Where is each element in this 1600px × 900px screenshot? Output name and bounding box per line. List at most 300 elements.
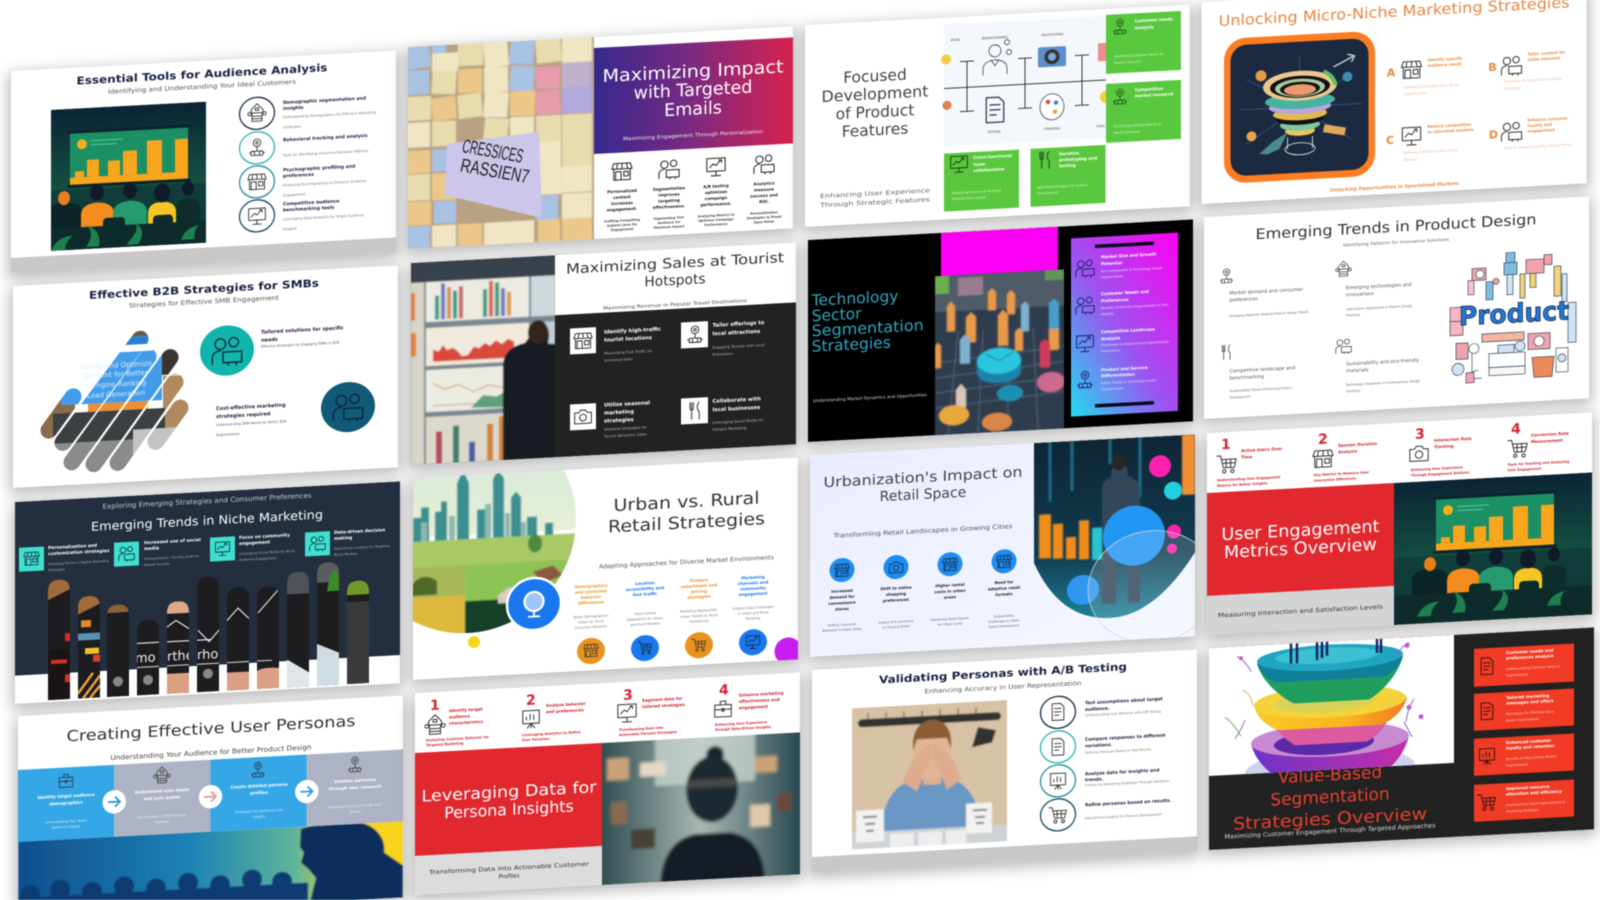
- trend items with teal icons: Leveraging Social Media for Niche: [239, 549, 295, 556]
- four strategy columns: channels and: [738, 579, 768, 586]
- trend items with teal icons: Personalization and: [48, 543, 97, 551]
- four strategy columns: assortment and: [681, 582, 717, 589]
- four tactics A to D: D: [1489, 128, 1498, 142]
- dark panel with four tactics: Engaging Tourists with Local: [712, 343, 765, 350]
- four tactics A to D: Identifying Profitable Micro-Niche: [1404, 83, 1459, 90]
- four strategy columns: Urban vs. Rural: [578, 619, 604, 624]
- list: four tools with circled icons: Competitive audience: [283, 198, 339, 207]
- list: four tools with circled icons: Strategies: [283, 124, 301, 129]
- four tactics A to D: C: [1386, 134, 1394, 147]
- four icon columns: A/B testing: [703, 183, 729, 189]
- four impact columns: Need for: [995, 579, 1014, 585]
- four strategy columns: and consumer: [575, 588, 607, 595]
- heading: Focused: [843, 66, 907, 87]
- four tactics A to D: Markets: [1404, 157, 1417, 162]
- top row: four numbered metrics: 2: [1318, 432, 1328, 448]
- heading: Strategies: [812, 334, 891, 356]
- four icon columns: [604, 154, 782, 233]
- green feature cards: Market Demand: [1114, 130, 1139, 135]
- four tactics A to D: [1386, 49, 1571, 163]
- text: cost-effective marketing: Segmentation: [216, 432, 240, 437]
- four strategy columns: behavior: [581, 594, 601, 600]
- process: four step blocks: Testing: [348, 809, 361, 814]
- timeline illustration: BRAINSTORMING: [982, 35, 1009, 41]
- four tactics A to D: Tailor content for: [1528, 50, 1565, 57]
- trend items with teal icons: Data-driven decision: [334, 527, 385, 536]
- arrows between steps: [103, 779, 318, 814]
- four impact columns: convenience: [828, 600, 856, 606]
- panel: Urbanization's Impact on Retail Space slide: [807, 433, 1216, 663]
- process: four step blocks: through user research: [329, 784, 381, 791]
- four strategy columns: Consumer Behavior: [575, 624, 608, 630]
- dark panel with four tactics: marketing: [604, 409, 634, 417]
- title band with gradient: with Targeted: [634, 78, 752, 104]
- timeline illustration: FINAL: [1097, 124, 1106, 128]
- four trend items: innovations: [1346, 291, 1374, 298]
- red benefit cards: messages and offers: [1506, 698, 1554, 706]
- trend items with teal icons: Data-Driven Insights for Targeting: [334, 544, 390, 551]
- dark panel with four tactics: Identify high-traffic: [604, 327, 661, 336]
- dark panel with four tactics: Maximizing Foot Traffic for: [604, 349, 653, 356]
- dark panel with four tactics: [555, 302, 796, 457]
- four icon columns: Crafting Compelling: [604, 218, 641, 224]
- top row: four numbered metrics: Interaction Rate: [1434, 436, 1472, 443]
- heading: Urban vs. Rural: [614, 487, 760, 515]
- four strategy columns: community: [740, 585, 766, 591]
- four icon columns: measure: [754, 186, 774, 192]
- gradient list panel: Potential: [1101, 260, 1123, 266]
- dark panel with four tactics: Leveraging Social Media for: [712, 418, 764, 425]
- panel: Essential Tools for Audience Analysis slide: [8, 50, 399, 279]
- illustration: layered funnel with people: [1225, 632, 1424, 797]
- four tactics A to D: Tools for Researching Micro-Niche Trends: [1503, 143, 1571, 150]
- grey subtitle: Transforming Data into Actionable Customer: [428, 862, 590, 876]
- list: four tools with circled icons: Demographic segmentation and: [283, 96, 366, 106]
- top row: four numbered metrics: User Engagement: [1508, 467, 1542, 472]
- four icon columns: Personalization: [750, 210, 779, 216]
- heading: [566, 252, 784, 288]
- illustration: colourful funnel in orange frame: [1224, 31, 1375, 184]
- heading: Development: [822, 82, 929, 106]
- process: four step blocks: [18, 749, 403, 842]
- four trend items: [1220, 257, 1420, 400]
- list: four tools with circled icons: Insights: [283, 227, 297, 231]
- trend items with teal icons: Emerging Niches in Digital Marketing: [48, 559, 109, 566]
- top row: four numbered steps: effectiveness and: [739, 697, 780, 704]
- top row: four numbered steps: Identify target: [449, 706, 483, 713]
- gradient list panel: Differentiation: [1101, 372, 1135, 378]
- top row: four numbered metrics: Conversion Rate: [1531, 431, 1569, 438]
- text: tailored solutions: Tailored solutions for specific: [261, 325, 344, 336]
- subheading: [819, 187, 930, 209]
- panel: Creating Effective User Personas slide: [15, 695, 406, 900]
- four trend items: Technology Integration in Contemporary Design: [1345, 379, 1420, 387]
- process: four step blocks: Create detailed persona: [231, 782, 288, 790]
- dark panel with four tactics: Hotspot Marketing: [712, 426, 746, 432]
- process: four step blocks: profiles: [250, 790, 268, 796]
- top row: four numbered metrics: Understanding User Engagement: [1217, 475, 1281, 482]
- heading: Retail Strategies: [608, 508, 765, 537]
- list: four test steps with circled icons: Understanding User Behavior with A/B Testing: [1085, 709, 1161, 717]
- four tactics A to D: audience needs: [1428, 61, 1463, 68]
- trend items with teal icons: Market Success: [144, 562, 170, 567]
- four strategy columns: Urban Trends vs. Rural: [680, 613, 718, 619]
- process: four step blocks: Insights: [253, 814, 266, 819]
- top row: four numbered steps: 4: [719, 682, 729, 699]
- list: four test steps with circled icons: Refining Personas Based on Test Results: [1085, 747, 1151, 755]
- process: four step blocks: Audience's Needs: [52, 824, 80, 830]
- timeline illustration: ATION: [950, 38, 960, 42]
- trend items with teal icons: Audience Engagement: [239, 556, 277, 562]
- list: four test steps with circled icons: Analyze data for insights and: [1085, 767, 1159, 777]
- heading: Segmentation: [812, 316, 924, 340]
- four trend items: Emerging technologies and: [1346, 282, 1412, 291]
- four trend items: Practices: [1346, 313, 1360, 317]
- subheading: Exploring Emerging Strategies and Consumer Preferences: [103, 492, 312, 511]
- green feature cards: Prioritizing Features Based on: [1114, 122, 1161, 128]
- list: four test steps with circled icons: audience.: [1085, 706, 1110, 713]
- top row: four numbered steps: 2: [526, 693, 536, 709]
- subheading: Identifying Patterns for Innovative Solutions: [1343, 237, 1450, 249]
- dark panel with four tactics: local attractions: [712, 329, 760, 337]
- top row: four numbered metrics: Time: [1241, 454, 1252, 460]
- photo: wall of sticky notes: [404, 33, 598, 253]
- laptop screen text: Revise and Optimize: [80, 360, 152, 371]
- green feature cards: Customer needs: [1135, 16, 1173, 23]
- four icon columns: Optimize Campaign: [698, 217, 734, 223]
- illustration: product doodles: [1450, 249, 1576, 384]
- heading: Segmentation: [1270, 784, 1390, 811]
- four impact columns: demand for: [829, 594, 855, 600]
- subheading: Maximizing Customer Engagement Through Targeted Approaches: [1224, 822, 1436, 841]
- four trend items: Market demand and consumer: [1230, 287, 1303, 297]
- four trend items: preferences: [1230, 296, 1258, 304]
- text: tailored solutions: [261, 325, 344, 349]
- green feature cards: Agile Methodologies for Feature: [1037, 183, 1088, 190]
- red benefit cards: Enhanced customer: [1506, 738, 1551, 745]
- photo: man covering eyes with eye charts: [848, 695, 1011, 854]
- top row: four numbered metrics: [1217, 419, 1570, 488]
- red benefit cards: preferences analysis: [1506, 653, 1554, 661]
- green feature cards: Iterative: [1059, 150, 1079, 156]
- process: four step blocks: Key Elements of Effective User: [138, 813, 187, 820]
- list: four tools with circled icons: Tools for Identifying Consumer Behavior Patterns: [282, 149, 369, 158]
- four icon columns: Personalized: [607, 188, 637, 194]
- panel: Maximizing Impact with Targeted Emails slide: [404, 22, 796, 255]
- list: four test steps with circled icons: variations.: [1085, 742, 1112, 749]
- four strategy columns: strategies: [687, 594, 711, 600]
- top row: four numbered steps: tailored strategies: [642, 702, 685, 709]
- top row: four numbered metrics: Measurement: [1531, 437, 1563, 444]
- laptop screen text: [80, 360, 152, 400]
- four icon columns: Subject Lines for: [607, 222, 638, 228]
- panel: Maximizing Sales at Tourist Hotspots slide: [407, 238, 799, 471]
- four icon columns: performance.: [700, 201, 732, 207]
- green feature cards: Development: [1037, 190, 1059, 196]
- photo: 3D market pins and pie: [931, 265, 1068, 439]
- four icon columns: ROI.: [759, 199, 769, 204]
- top row: four numbered metrics: 1: [1221, 437, 1231, 453]
- trend items with teal icons: Increased use of social: [144, 537, 201, 546]
- subheading: Enhancing User Experience: [820, 187, 930, 200]
- list: four tools with circled icons: Behavioral tracking and analysis: [283, 133, 368, 143]
- heading: Effective B2B Strategies for SMBs: [89, 278, 319, 302]
- red benefit cards: loyalty and retention: [1506, 743, 1555, 751]
- green feature cards: market research: [1135, 91, 1173, 98]
- gradient list panel: Preferences: [1101, 297, 1129, 303]
- icon: teal circle with team: [200, 324, 254, 377]
- text: cost-effective marketing: Cost-effective marketing: [216, 402, 286, 412]
- top row: four numbered steps: 1: [430, 698, 440, 714]
- heading: [824, 465, 1022, 508]
- four icon columns: increases: [611, 200, 634, 206]
- grey subtitle: [415, 846, 602, 895]
- four impact columns: Increased: [831, 588, 853, 594]
- four strategy columns: Target Demographics:: [572, 614, 609, 619]
- list: four test steps with circled icons: Test assumptions about target: [1085, 696, 1164, 706]
- four tactics A to D: Opportunities: [1404, 91, 1427, 96]
- green feature cards: Measuring Success of Targeted: [952, 188, 1001, 195]
- gradient list panel: Markets: [1101, 312, 1114, 316]
- heading: Strategies Overview: [1233, 804, 1427, 835]
- gradient list panel: Customer Needs and: [1101, 289, 1149, 296]
- gradient list panel: Market Size and Growth: [1101, 251, 1156, 259]
- green feature cards: Features Post-Launch: [952, 195, 986, 201]
- top row: four numbered steps: Analyze behavior: [546, 701, 586, 708]
- subheading: Strategies for Effective SMB Engagement: [129, 295, 280, 310]
- timeline illustration: PROTOTYPING: [1041, 32, 1064, 37]
- top row: four numbered steps: [425, 679, 784, 747]
- four icon columns: Audience for: [658, 220, 681, 225]
- process: four step blocks: Techniques for Gathering User: [234, 808, 284, 814]
- list: four tools with circled icons: Engagement: [283, 192, 306, 197]
- four trend items: Development: [1230, 394, 1251, 400]
- four impact columns: areas: [944, 594, 957, 600]
- gradient list panel: Benefits of Effective Segmentation in Tech: [1101, 303, 1168, 310]
- four impact columns: Higher rental: [935, 582, 965, 588]
- dark panel with four tactics: Utilize seasonal: [604, 400, 650, 409]
- four impact columns: Sustainability: [994, 614, 1015, 619]
- illustration: audience watching bar chart: [1392, 472, 1592, 626]
- red benefit cards: Techniques for Effective Value-: [1505, 709, 1555, 716]
- four icon columns: engagement.: [607, 206, 638, 212]
- four tactics A to D: A: [1387, 66, 1396, 80]
- subheading: Adapting Approaches for Diverse Market Environments: [599, 554, 774, 571]
- process: four step blocks: demographics: [49, 800, 83, 806]
- four trend items: materials: [1346, 367, 1369, 374]
- photo strips: marketing chalkboard: rthe: [167, 648, 194, 665]
- four strategy columns: Location: [635, 580, 655, 586]
- top row: four numbered steps: through Data-Driven Insights: [715, 725, 771, 732]
- list: four test steps with circled icons: Enhancing Marketing Strategies Through Validation: [1085, 779, 1170, 787]
- four tactics A to D: Marketing: [1504, 86, 1520, 91]
- text: tailored solutions: needs: [261, 337, 278, 344]
- four impact columns: Challenges in Urban: [988, 618, 1020, 624]
- top row: four numbered steps: Analyzing Customer Behavior for: [426, 735, 489, 742]
- red benefit cards: Implementing Value Segmentation in: [1506, 800, 1565, 807]
- four strategy columns: engagement: [739, 591, 768, 597]
- green feature cards: [944, 11, 1181, 212]
- panel: Urban vs. Rural Retail Strategies slide: [403, 452, 808, 692]
- red benefit cards: Marketing Strategies: [1506, 808, 1539, 814]
- top row: four numbered metrics: Analysis: [1338, 448, 1358, 454]
- red title panel: Persona Insights: [444, 797, 574, 822]
- four impact columns: Redefining Retail Spaces: [931, 616, 969, 622]
- top row: four numbered metrics: 4: [1511, 421, 1521, 438]
- gradient list panel: Analysis: [1101, 335, 1121, 341]
- four icon columns: optimizes: [705, 189, 728, 195]
- trend items with teal icons: making: [334, 535, 352, 542]
- four trend items: Competitive landscape and: [1230, 365, 1295, 375]
- dark panel with four tactics: Promotions: [712, 352, 733, 357]
- trend items with teal icons: Strategies: [48, 567, 65, 572]
- process: four step blocks: Understanding Your Target: [45, 818, 88, 825]
- top row: four numbered steps: characteristics: [449, 719, 484, 726]
- four impact columns: [822, 548, 1020, 638]
- dark panel with four tactics: Collaborate with: [712, 396, 761, 405]
- four impact columns: Behaviors in Urban Areas: [822, 627, 862, 633]
- heading: Validating Personas with A/B Testing: [879, 661, 1127, 686]
- top row: four numbered metrics: 3: [1415, 426, 1425, 443]
- top row: four numbered steps: audience: [449, 713, 470, 719]
- four trend items: Solutions: [1346, 389, 1361, 393]
- gradient list panel: Competitive Landscape: [1101, 326, 1155, 334]
- green feature cards: Competitive: [1135, 86, 1163, 92]
- top row: four numbered metrics: Key Metrics to Measure User: [1314, 470, 1369, 477]
- grey subtitle: Measuring Interaction and Satisfaction Levels: [1218, 604, 1383, 619]
- four strategy columns: Adaptations for Urban: [627, 616, 663, 622]
- four impact columns: on Physical Retail: [882, 624, 910, 630]
- timeline illustration: ITERATING: [1044, 126, 1061, 131]
- grey subtitle: Profiles: [498, 873, 520, 881]
- red benefit cards: Benefits of Value-Driven Market: [1506, 754, 1557, 761]
- note: large lavender paper with handwriting: [444, 132, 542, 223]
- text: tailored solutions: Effective Strategies for Engaging SMBs in B2B: [261, 341, 340, 349]
- four icon columns: Strategies to Boost: [747, 214, 782, 220]
- heading: Features: [842, 119, 908, 141]
- panel: Effective B2B Strategies for SMBs slide: [10, 265, 401, 494]
- four impact columns: Impact of E-commerce: [878, 619, 914, 625]
- four strategy columns: Product: [690, 577, 708, 583]
- four impact columns: preferences: [883, 597, 910, 603]
- top row: four numbered metrics: Tracking: [1434, 443, 1454, 449]
- four tactics A to D: Building Authority in Micro-Niche: [1404, 148, 1458, 155]
- top row: four numbered steps: 3: [623, 687, 633, 704]
- four tactics A to D: Identify specific: [1428, 56, 1463, 62]
- subheading: Understanding Market Dynamics and Opportunities: [813, 392, 927, 403]
- illustration: audience watching bar chart: [50, 101, 207, 252]
- heading: [811, 286, 924, 356]
- top row: four numbered steps: Enhancing User Experience: [715, 720, 768, 727]
- top row: four numbered metrics: Active Users Over: [1241, 446, 1282, 453]
- four trend items: Sustainability and eco-friendly: [1346, 357, 1419, 367]
- green feature cards: testing: [1059, 163, 1076, 168]
- four tactics A to D: loyalty and: [1528, 122, 1552, 128]
- four icon columns: Open Rates: [754, 219, 774, 225]
- dark panel with four tactics: Increased Sales: [604, 357, 633, 363]
- heading: Creating Effective User Personas: [67, 712, 356, 745]
- four impact columns: Shifting Consumer: [828, 622, 857, 628]
- green feature cards: team: [973, 161, 986, 167]
- four strategy columns: Retailing: [746, 616, 760, 621]
- red benefit cards: Segmentation: [1506, 672, 1528, 678]
- footer tagline: Unlocking Opportunities in Specialized Markets: [1330, 181, 1459, 194]
- image: city and countryside circle: [412, 470, 576, 634]
- laptop screen text: Content for Better: [84, 369, 148, 380]
- heading: of Product: [836, 101, 914, 123]
- four icon columns: Analytics: [753, 180, 775, 187]
- photo strips: marketing chalkboard: mo: [135, 650, 156, 667]
- dark panel with four tactics: local businesses: [712, 405, 760, 413]
- heading: Value-Based: [1278, 763, 1382, 788]
- timeline illustration: [941, 16, 1112, 147]
- four tactics A to D: Reduce competition: [1428, 122, 1471, 129]
- list: four test steps with circled icons: Data-Driven Insights for Persona Development: [1085, 812, 1162, 820]
- icon: navy circle with team: [321, 381, 375, 434]
- heading: Retail Space: [880, 485, 966, 505]
- list: four test steps with circled icons: trends.: [1085, 776, 1104, 783]
- process: four step blocks: Validate personas: [334, 777, 377, 784]
- illustration: sliced laptop: [40, 330, 190, 473]
- four impact columns: Retail Development: [989, 623, 1020, 629]
- red benefit cards: Tailored marketing: [1506, 693, 1549, 700]
- note: large lavender paper with handwriting: RASSIEN7: [458, 155, 531, 188]
- panel: Technology Sector Segmentation Strategies slide: [805, 219, 1196, 448]
- four strategy columns: differences: [578, 599, 604, 606]
- four strategy columns: foot traffic: [633, 591, 658, 597]
- list: four tools with circled icons: Leveraging Data Analytics for Target Audience: [283, 213, 364, 221]
- four trend items: benchmarking: [1230, 374, 1264, 382]
- four strategy columns: pricing: [691, 588, 707, 594]
- photo: man with floating orbs and bar chart: [1034, 434, 1195, 633]
- trend items with teal icons: Niche Markets: [334, 552, 358, 557]
- title band with gradient: [594, 37, 793, 154]
- four trend items: Sustainability Trends Influencing Product: [1230, 386, 1293, 393]
- four icon columns: Segmenting Your: [654, 215, 685, 221]
- top row: four numbered steps: and preferences: [546, 707, 584, 714]
- four icon columns: Engagement: [611, 227, 634, 232]
- top row: four numbered steps: engagement: [739, 704, 768, 710]
- four icon columns: improves: [658, 191, 680, 198]
- process: four step blocks: Personas: [155, 819, 169, 824]
- four impact columns: adaptive retail: [988, 585, 1020, 591]
- gradient list panel: Future Trends in Technology Sector: [1101, 378, 1157, 385]
- green feature cards: Product Features: [1114, 60, 1141, 65]
- four strategy columns: Marketing Approaches:: [680, 608, 718, 614]
- trend items with teal icons: [19, 527, 390, 574]
- four strategy columns: [572, 574, 774, 665]
- glass circle outline: [1088, 527, 1216, 646]
- red title panel: [1207, 483, 1394, 596]
- green feature cards: Cross-functional: [973, 153, 1012, 160]
- four icon columns: success and: [750, 192, 778, 199]
- photo strips: marketing chalkboard: rho: [197, 647, 218, 663]
- list: four test steps with circled icons: Compare responses to different: [1085, 733, 1166, 743]
- process: four step blocks: Understand user needs: [135, 787, 190, 795]
- trend items with teal icons: Focus on community: [239, 532, 290, 541]
- four icon columns: targeting: [658, 197, 680, 204]
- dark panel with four tactics: Seasonal Strategies for: [604, 425, 647, 432]
- four strategy columns: Store Format: [634, 611, 656, 616]
- top row: four numbered metrics: Metrics for Better Insights: [1217, 481, 1268, 488]
- process: four step blocks: Validating Personas Through User: [328, 803, 382, 809]
- top row: four numbered steps: Actionable Persona Strategies: [619, 730, 677, 737]
- subheading: Identifying and Understanding Your Ideal Customers: [108, 79, 296, 96]
- gradient list panel: Product and Service: [1101, 365, 1148, 372]
- gradient list panel: Segmentation: [1101, 274, 1123, 279]
- top row: four numbered steps: User Personas: [522, 737, 549, 742]
- heading: Hotspots: [644, 271, 706, 291]
